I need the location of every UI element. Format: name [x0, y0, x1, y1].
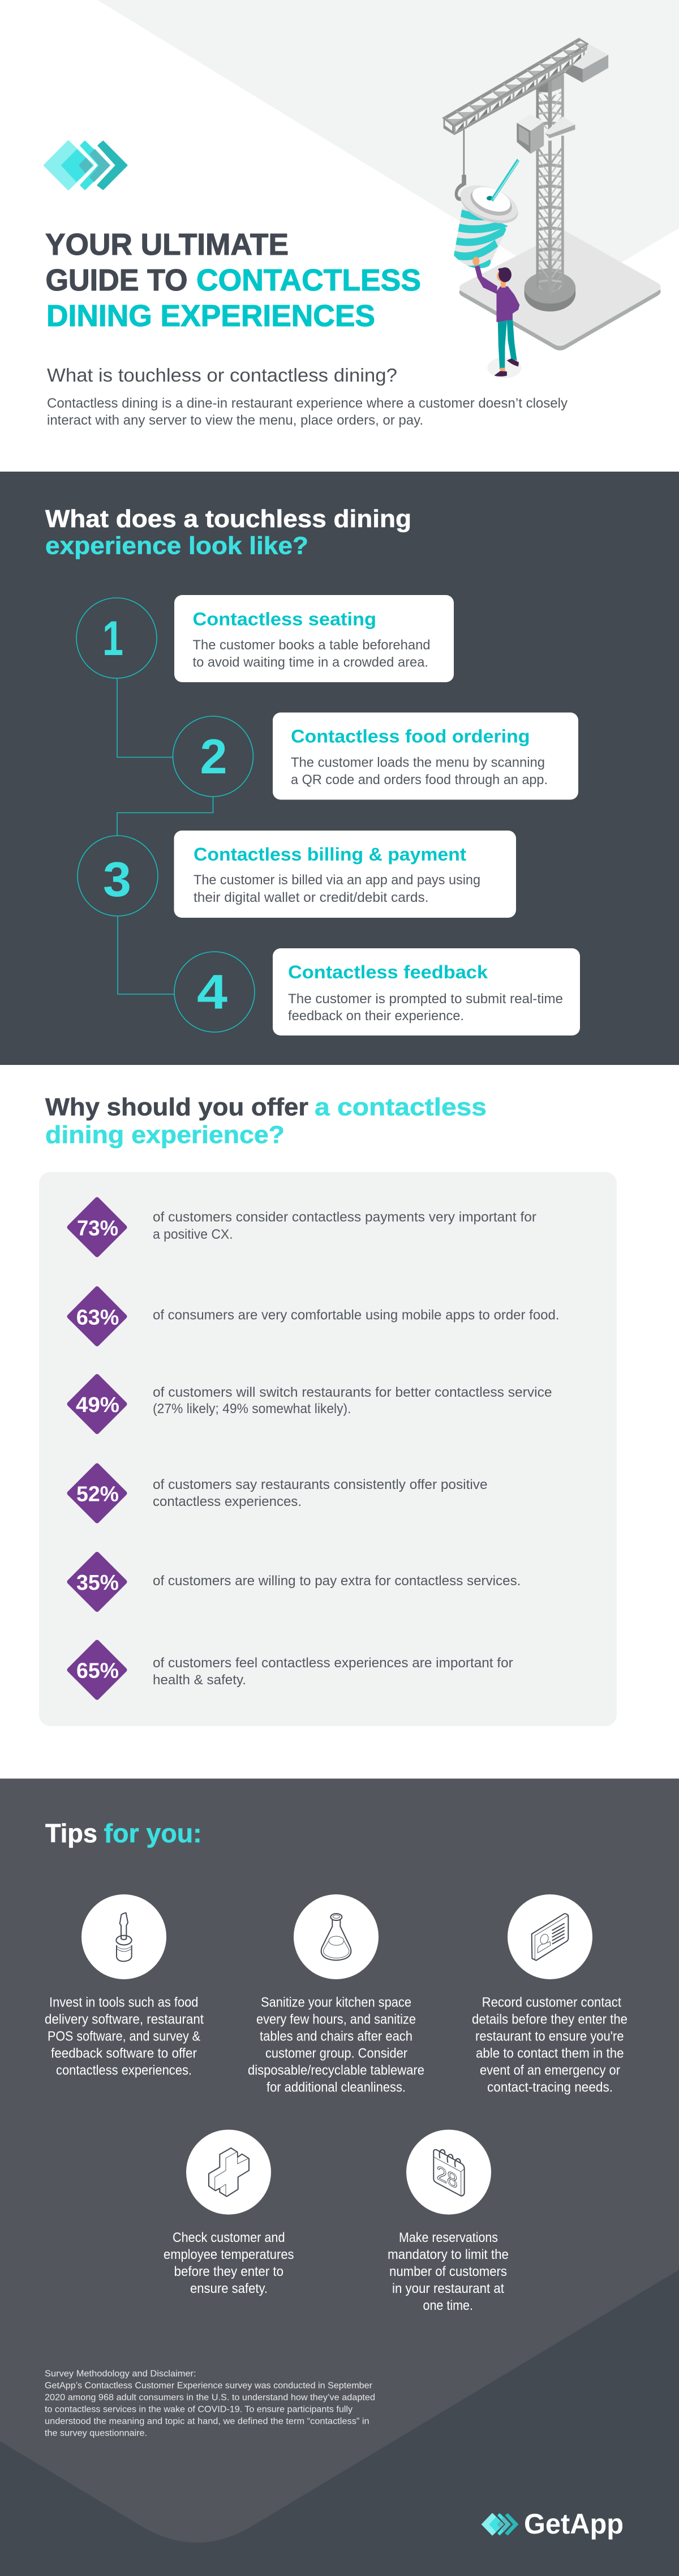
stat: 52%: of customers say restaurants consistently offer positive — [153, 1477, 488, 1492]
platform — [459, 231, 661, 350]
tip: invest in tools: delivery software, restaurant — [45, 2012, 204, 2027]
step 1 — [76, 595, 454, 682]
icon: calendar: 28 — [436, 2161, 458, 2193]
stats panel background — [39, 1172, 617, 1726]
survey methodology and disclaimer: understood the meaning and topic at hand, we defined the term “contactless” in — [45, 2416, 369, 2426]
icon: calendar — [433, 2150, 465, 2196]
tip: invest in tools: Invest in tools such as food — [49, 1995, 198, 2010]
illustration: crane lifting a cup — [444, 38, 661, 378]
intro text: interact with any server to view the menu, place orders, or pay. — [47, 413, 423, 428]
tip: record contact details: event of an emergency or — [480, 2062, 620, 2078]
stat: 73%: a positive CX. — [153, 1227, 233, 1242]
panel: why offer contactless dining — [39, 1093, 617, 1726]
tip: record contact details — [472, 1894, 628, 2095]
tip: sanitize: Sanitize your kitchen space — [261, 1995, 411, 2010]
stat: 49%: (27% likely; 49% somewhat likely). — [153, 1401, 351, 1417]
title — [45, 228, 421, 333]
tip: sanitize: disposable/recyclable tableware — [248, 2062, 424, 2078]
tip: mandatory reservations: Make reservations — [399, 2230, 498, 2245]
tip: mandatory reservations: in your restaurant at — [392, 2281, 504, 2296]
tip: invest in tools: contactless experiences. — [56, 2062, 192, 2078]
tip: check temperatures: before they enter to — [174, 2264, 283, 2279]
title: DINING EXPERIENCES — [46, 299, 375, 333]
tip: check temperatures: ensure safety. — [190, 2281, 268, 2296]
stat: 49%: of customers will switch restaurants for better contactless service — [153, 1385, 552, 1400]
hook — [456, 130, 466, 199]
heading: Tips — [45, 1818, 97, 1848]
icon: ID card — [532, 1914, 568, 1961]
survey methodology and disclaimer: 2020 among 968 adult consumers in the U.S. to understand how they’ve adapted — [45, 2393, 375, 2402]
stat: 63% — [69, 1289, 559, 1344]
step 1: 1 — [102, 611, 123, 666]
stat: 35%: of customers are willing to pay extra for contactless services. — [153, 1573, 521, 1589]
tip: record contact details: contact-tracing needs. — [487, 2079, 613, 2095]
tip: sanitize: for additional cleanliness. — [267, 2079, 406, 2095]
tip: invest in tools: POS software, and survey & — [48, 2029, 200, 2044]
stat: 65%: 65% — [76, 1659, 119, 1683]
step 2: The customer loads the menu by scanning — [291, 755, 545, 770]
stat: 49%: 49% — [76, 1393, 119, 1417]
step 1: Contactless seating — [192, 609, 376, 630]
step 4: 4 — [197, 965, 227, 1020]
stat: 73%: 73% — [77, 1217, 118, 1240]
stat: 73%: of customers consider contactless payments very important for — [153, 1210, 536, 1225]
survey methodology and disclaimer: GetApp’s Contactless Customer Experience survey was conducted in September — [45, 2381, 372, 2390]
GetApp logo — [482, 2508, 624, 2540]
stat: 65% — [69, 1642, 513, 1697]
subheading: What is touchless or contactless dining? — [47, 365, 397, 386]
survey methodology and disclaimer: Survey Methodology and Disclaimer: — [45, 2369, 196, 2378]
heading: What does a touchless dining — [45, 505, 411, 533]
tip: invest in tools — [45, 1894, 204, 2078]
heading — [45, 1818, 202, 1848]
icon: GetApp logo mark — [45, 142, 127, 189]
intro text — [47, 396, 568, 428]
step 3: their digital wallet or credit/debit cards. — [194, 890, 429, 905]
step 3: 3 — [103, 853, 131, 907]
step 4: feedback on their experience. — [288, 1008, 464, 1024]
survey methodology and disclaimer: to contactless services in the wake of COVID-19. To ensure participants fully — [45, 2404, 353, 2414]
crane tower — [536, 74, 564, 296]
step 4 — [174, 948, 580, 1035]
connector lines — [117, 678, 213, 994]
stat: 73% — [69, 1199, 536, 1255]
survey methodology and disclaimer — [45, 2369, 375, 2438]
heading: experience look like? — [45, 532, 308, 559]
tip: check temperatures — [164, 2130, 294, 2296]
intro text: Contactless dining is a dine-in restaurant experience where a customer doesn’t closely — [47, 396, 568, 411]
cup — [453, 207, 508, 268]
crane jib — [444, 38, 587, 135]
heading: dining experience? — [45, 1121, 285, 1149]
step 2 — [173, 712, 578, 799]
tower base — [525, 272, 575, 311]
tip: sanitize — [248, 1894, 424, 2095]
title: GUIDE TO — [45, 263, 188, 297]
stat: 52%: 52% — [76, 1482, 119, 1506]
crane cabin — [517, 114, 544, 154]
tip: invest in tools: feedback software to offer — [51, 2046, 197, 2061]
stat: 35% — [69, 1554, 521, 1610]
person — [472, 256, 522, 378]
tower deck — [544, 117, 575, 138]
tip: check temperatures: Check customer and — [173, 2230, 285, 2245]
stat: 52%: contactless experiences. — [153, 1494, 302, 1509]
heading — [45, 505, 411, 559]
title: YOUR ULTIMATE — [45, 228, 289, 262]
step 3 — [78, 831, 516, 918]
step 2: Contactless food ordering — [291, 726, 530, 747]
survey methodology and disclaimer: the survey questionnaire. — [45, 2428, 147, 2438]
GetApp logo: GetApp — [524, 2508, 624, 2540]
tip: sanitize: tables and chairs after each — [260, 2029, 412, 2044]
heading — [45, 1093, 487, 1149]
stat: 52% — [69, 1465, 488, 1521]
heading: a contactless — [315, 1093, 487, 1121]
heading: for you: — [104, 1818, 202, 1848]
step 4: Contactless feedback — [288, 962, 488, 982]
stat: 65%: health & safety. — [153, 1672, 246, 1688]
tip: check temperatures: employee temperatures — [164, 2247, 294, 2262]
step 3: Contactless billing & payment — [194, 844, 466, 865]
tip: mandatory reservations: one time. — [423, 2298, 473, 2313]
icon: screwdriver — [116, 1913, 132, 1961]
tip: mandatory reservations — [388, 2130, 509, 2313]
step 1: to avoid waiting time in a crowded area. — [192, 654, 428, 670]
panel: tips — [0, 1779, 679, 2576]
background shape — [97, 0, 679, 291]
panel: hero — [45, 0, 679, 428]
tip: sanitize: every few hours, and sanitize — [256, 2012, 416, 2027]
cup lid and straw — [458, 160, 521, 230]
stat: 65%: of customers feel contactless experiences are important for — [153, 1655, 513, 1671]
step 2: 2 — [200, 730, 227, 784]
tip: sanitize: customer group. Consider — [265, 2046, 407, 2061]
stat: 49% — [69, 1376, 552, 1432]
panel: what touchless dining looks like — [0, 472, 679, 1065]
stat: 35%: 35% — [76, 1571, 119, 1595]
tip: mandatory reservations: mandatory to limit the — [388, 2247, 509, 2262]
icon: flask — [321, 1914, 351, 1960]
step 4: The customer is prompted to submit real-time — [288, 991, 563, 1007]
counterweight — [564, 43, 608, 83]
step 2: a QR code and orders food through an app. — [291, 772, 548, 788]
tip: record contact details: Record customer contact — [482, 1995, 621, 2010]
heading: Why should you offer — [45, 1093, 308, 1121]
icon: medical cross — [209, 2148, 249, 2197]
stat: 63%: 63% — [76, 1306, 119, 1329]
tip: record contact details: able to contact them in the — [476, 2046, 624, 2061]
tip: record contact details: restaurant to ensure you're — [475, 2029, 624, 2044]
tip: mandatory reservations: number of customers — [389, 2264, 507, 2279]
step 1: The customer books a table beforehand — [192, 637, 430, 653]
tip: record contact details: details before they enter the — [472, 2012, 628, 2027]
title: CONTACTLESS — [196, 263, 421, 297]
stat: 63%: of consumers are very comfortable using mobile apps to order food. — [153, 1308, 559, 1323]
step 3: The customer is billed via an app and pays using — [194, 872, 480, 888]
